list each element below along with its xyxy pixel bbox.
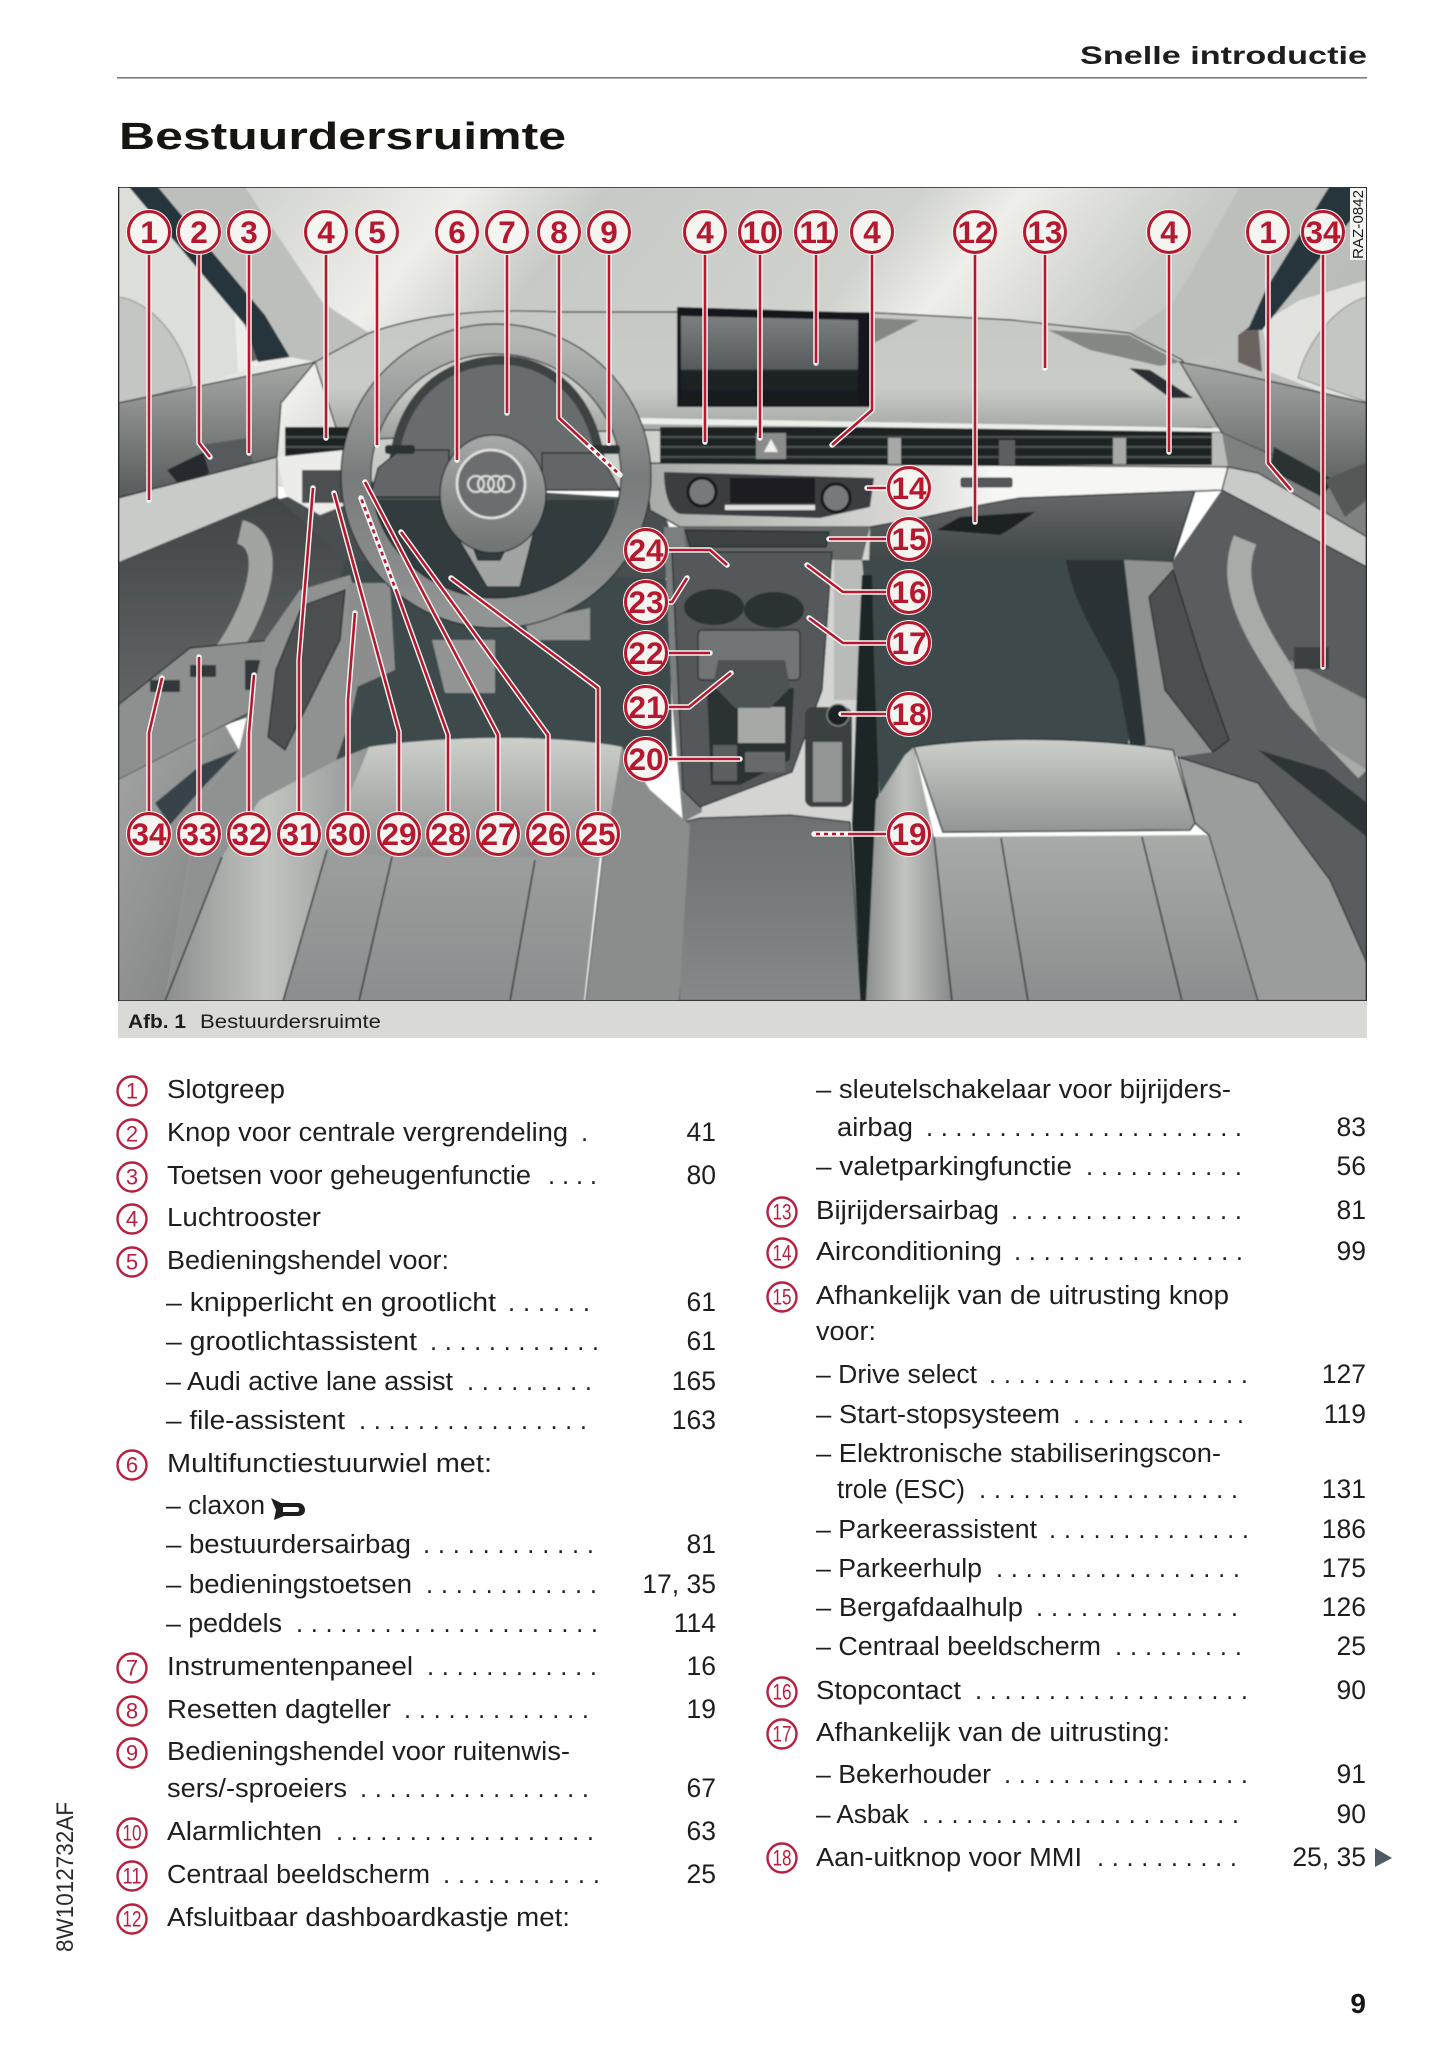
item 9: sers/-sproeiers xyxy=(167,1775,347,1803)
callout 32 xyxy=(226,675,272,857)
item 2: 2 xyxy=(126,1122,138,1146)
right column: legend list xyxy=(768,1076,1392,1872)
callout 14 xyxy=(867,465,932,511)
item 15 sub: Drive select: – Drive select xyxy=(816,1361,977,1389)
item 15 sub: Parkeerhulp xyxy=(816,1553,1366,1583)
callout 26: 26 xyxy=(530,816,566,852)
item 2 xyxy=(118,1117,716,1148)
item 5 sub: file-assistent xyxy=(166,1405,716,1435)
callout 19 xyxy=(814,811,932,857)
item 3: 3 xyxy=(126,1164,138,1190)
caption bar: Afb. 1 xyxy=(128,1011,186,1033)
item 6 sub: bestuurdersairbag: – bestuurdersairbag xyxy=(166,1531,411,1559)
item 1: Slotgreep xyxy=(167,1076,285,1104)
item 15: voor: xyxy=(816,1318,876,1346)
item 16 xyxy=(768,1675,1366,1706)
item 1 xyxy=(118,1076,285,1106)
item 15 sub: Start-stopsysteem xyxy=(816,1399,1366,1429)
item 15 sub: Centraal beeldscherm xyxy=(816,1631,1366,1661)
item 12 sub: sleutelschakelaar: 83 xyxy=(1337,1112,1366,1142)
item 8: Resetten dagteller xyxy=(167,1696,392,1724)
item 6 sub: bedieningstoetsen xyxy=(166,1569,716,1599)
item 5 sub: file-assistent: 163 xyxy=(672,1405,716,1435)
callout 19: 19 xyxy=(891,816,927,852)
item 13: . . . . . . . . . . . . . . . . xyxy=(1011,1197,1242,1225)
item 12: 12 xyxy=(122,1906,142,1932)
item 15 sub: Parkeerhulp: – Parkeerhulp xyxy=(816,1555,982,1583)
callout 3 xyxy=(226,209,272,453)
callout 25 xyxy=(451,578,621,857)
item 8: 19 xyxy=(687,1694,716,1724)
callout 7 xyxy=(484,209,530,413)
item 15 sub: ESC: trole (ESC) xyxy=(837,1476,965,1504)
callout 4 right vent: 4 xyxy=(1160,214,1178,250)
item 15 sub: Drive select xyxy=(816,1359,1366,1389)
item 14: 14 xyxy=(772,1240,792,1266)
item 15 sub: ESC: . . . . . . . . . . . . . . . . . . xyxy=(979,1476,1238,1504)
instrument binnacle xyxy=(392,360,602,480)
item 12 sub: sleutelschakelaar xyxy=(816,1076,1366,1142)
center armrest xyxy=(679,815,861,1001)
item 9 xyxy=(118,1738,716,1803)
wheel lower void xyxy=(375,500,615,603)
item 1: 1 xyxy=(126,1078,138,1104)
MMI storage xyxy=(805,707,852,807)
cup holders xyxy=(684,589,744,625)
item 12: Afsluitbaar dashboardkastje met: xyxy=(167,1904,570,1932)
callout 10 xyxy=(737,209,783,438)
callout 4 center right vent: 4 xyxy=(863,214,881,250)
header: Snelle introductie: Snelle introductie xyxy=(1080,42,1367,70)
driver seat xyxy=(165,738,690,1001)
callout 9 xyxy=(586,209,632,443)
item 15 sub: Centraal beeldscherm: – Centraal beeldscherm xyxy=(816,1633,1101,1661)
callout 27 xyxy=(365,482,521,857)
item 13: 81 xyxy=(1337,1195,1366,1225)
callout 12 xyxy=(952,209,998,522)
callout 8 xyxy=(536,209,620,475)
vent band left xyxy=(284,426,350,457)
callout 2 xyxy=(176,209,222,457)
left door sill and speaker xyxy=(165,575,368,1001)
callout 31 xyxy=(276,488,322,857)
callout 21 xyxy=(623,673,731,730)
item 8: . . . . . . . . . . . . . xyxy=(404,1696,589,1724)
right door upper xyxy=(1178,360,1366,478)
item 15 sub: Parkeerassistent: – Parkeerassistent xyxy=(816,1516,1037,1544)
callout 11 xyxy=(793,209,839,363)
callout 1 right: 1 xyxy=(1259,214,1277,250)
item 16: Stopcontact xyxy=(816,1677,961,1705)
item 2: 41 xyxy=(687,1117,716,1147)
page number: 9 xyxy=(1350,1988,1366,2019)
item 18 xyxy=(768,1842,1366,1872)
callout 8: 8 xyxy=(550,214,568,250)
item 15 sub: Bergafdaalhulp xyxy=(816,1592,1366,1622)
item 5: Bedieningshendel voor: xyxy=(167,1247,449,1275)
item 3: 80 xyxy=(687,1160,716,1190)
item 5 sub: lane assist xyxy=(166,1366,716,1396)
title: Bestuurdersruimte xyxy=(119,116,566,158)
item 9: 67 xyxy=(687,1773,716,1803)
item 17 sub: Asbak: . . . . . . . . . . . . . . . . . . . . . . xyxy=(922,1801,1239,1829)
item 7 xyxy=(118,1651,716,1682)
caption bar: Bestuurdersruimte xyxy=(200,1011,381,1033)
callout 11: 11 xyxy=(799,214,833,250)
item 18: 25, 35 xyxy=(1292,1842,1366,1872)
item 5 sub: lane assist: . . . . . . . . . xyxy=(467,1368,592,1396)
callout 23 xyxy=(623,578,687,625)
Audi emblem xyxy=(457,450,525,518)
callout 17 xyxy=(809,618,932,666)
callout 13: 13 xyxy=(1027,214,1063,250)
callout 14: 14 xyxy=(891,470,927,506)
right side window and mirror xyxy=(1238,280,1367,410)
passenger seat xyxy=(866,739,1367,1001)
item 15 sub: Centraal beeldscherm: . . . . . . . . . xyxy=(1115,1633,1242,1661)
continuation arrow xyxy=(1375,1848,1392,1867)
callout 6 xyxy=(434,209,480,460)
item 17 sub: Asbak: 90 xyxy=(1337,1799,1366,1829)
item 14: Airconditioning xyxy=(816,1238,1002,1266)
shifter pad xyxy=(698,630,800,680)
item 15 sub: ESC: – Elektronische stabiliseringscon- xyxy=(816,1440,1221,1468)
callout 25: 25 xyxy=(580,816,616,852)
callout 33: 33 xyxy=(181,816,217,852)
item 5 sub: lane assist: 165 xyxy=(672,1366,716,1396)
item 6 sub: bedieningstoetsen: 17, 35 xyxy=(642,1569,716,1599)
callout 29: 29 xyxy=(381,816,417,852)
callout 3: 3 xyxy=(240,214,258,250)
windshield xyxy=(118,187,1367,487)
item 5 sub: lane assist: – Audi active lane assist xyxy=(166,1368,453,1396)
right footwell xyxy=(852,560,1146,1001)
quattro badge xyxy=(961,478,1012,487)
item 9: Bedieningshendel voor ruitenwis- xyxy=(167,1738,570,1766)
callout 9: 9 xyxy=(600,214,618,250)
callout 4 right vent xyxy=(1146,209,1192,452)
item 15 sub: Start-stopsysteem: – Start-stopsysteem xyxy=(816,1401,1060,1429)
callout 10: 10 xyxy=(742,214,778,250)
item 8: 8 xyxy=(126,1698,138,1724)
dashboard pad xyxy=(315,311,1225,440)
item 10 xyxy=(118,1816,716,1848)
left A-pillar xyxy=(129,187,369,362)
item 5 sub: grootlichtassistent: – grootlichtassistent xyxy=(166,1328,417,1356)
item 6 sub: bestuurdersairbag xyxy=(166,1529,716,1559)
item 5 sub: file-assistent: . . . . . . . . . . . . . . . . xyxy=(359,1407,587,1435)
item 4: 4 xyxy=(126,1206,138,1232)
item 5: 5 xyxy=(126,1250,138,1274)
callout 18: 18 xyxy=(891,696,927,732)
callout 31: 31 xyxy=(281,816,317,852)
item 11: 11 xyxy=(122,1864,142,1888)
item 6: Multifunctiestuurwiel met: xyxy=(167,1450,492,1478)
callout 28 xyxy=(361,498,471,857)
illustration: car interior xyxy=(118,187,1367,1001)
lower dash under wheel xyxy=(277,480,680,640)
item 5 sub: knipperlicht: 61 xyxy=(687,1287,716,1317)
item 15: Afhankelijk van de uitrusting knop xyxy=(816,1282,1229,1310)
item 6 sub: peddels: 114 xyxy=(674,1608,716,1638)
left footwell xyxy=(290,560,672,800)
item 6 sub: bedieningstoetsen: . . . . . . . . . . . . xyxy=(426,1571,597,1599)
item 6 sub: peddels: – peddels xyxy=(166,1610,282,1638)
central screen xyxy=(677,307,872,407)
callout 24 xyxy=(623,527,727,573)
item 10: Alarmlichten xyxy=(167,1818,322,1846)
callout 34 left: 34 xyxy=(131,816,167,852)
item 18: . . . . . . . . . . xyxy=(1097,1844,1237,1872)
callout 20: 20 xyxy=(628,741,664,777)
callout 18 xyxy=(841,691,932,737)
item 17 sub: Bekerhouder: 91 xyxy=(1337,1759,1366,1789)
item 11: . . . . . . . . . . . xyxy=(443,1861,600,1889)
callout 5 xyxy=(354,209,400,445)
callout 1 right xyxy=(1245,209,1291,490)
callout 32: 32 xyxy=(231,816,267,852)
item 4 xyxy=(118,1204,322,1234)
item 15: 15 xyxy=(772,1284,792,1310)
item 6 sub: bestuurdersairbag: 81 xyxy=(687,1529,716,1559)
item 5 sub: knipperlicht: – knipperlicht en grootlicht xyxy=(166,1289,496,1317)
callout 1 left xyxy=(126,209,172,500)
artwork code label: RAZ-0842 xyxy=(1350,190,1367,259)
item 15 sub: Start-stopsysteem: 119 xyxy=(1324,1399,1366,1429)
steering wheel xyxy=(341,324,651,628)
dash trim strip xyxy=(645,463,1228,527)
item 15 xyxy=(768,1282,1229,1346)
pedals and column xyxy=(348,583,590,693)
item 13: Bijrijdersairbag xyxy=(816,1197,999,1225)
item 17 sub: Bekerhouder: . . . . . . . . . . . . . . . . . xyxy=(1004,1761,1248,1789)
item 7: Instrumentenpaneel xyxy=(167,1653,413,1681)
callout 7: 7 xyxy=(498,214,516,250)
stalks xyxy=(385,445,415,454)
item 17 sub: Bekerhouder xyxy=(816,1759,1366,1789)
callout 17: 17 xyxy=(891,625,927,661)
item 11: Centraal beeldscherm xyxy=(167,1861,430,1889)
item 15 sub: Parkeerassistent xyxy=(816,1514,1366,1544)
frame border xyxy=(118,187,1366,1001)
item 15 sub: Parkeerassistent: 186 xyxy=(1322,1514,1366,1544)
item 9: 9 xyxy=(126,1740,138,1766)
button strip xyxy=(685,530,829,547)
item 4: Luchtrooster xyxy=(167,1204,322,1232)
item 17 sub: Asbak: – Asbak xyxy=(816,1801,909,1829)
callout 34 right: 34 xyxy=(1305,214,1341,250)
item 12 sub: valetparkingfunctie: 56 xyxy=(1337,1151,1366,1181)
callout 13 xyxy=(1022,209,1068,368)
item 6: 6 xyxy=(126,1452,138,1478)
left side window and mirror xyxy=(119,188,259,402)
vent band center and right xyxy=(640,418,1224,465)
callout 23: 23 xyxy=(628,584,664,620)
item 15 sub: ESC: 131 xyxy=(1322,1474,1366,1504)
item 10: . . . . . . . . . . . . . . . . . . xyxy=(336,1818,594,1846)
item 15 sub: Bergafdaalhulp: – Bergafdaalhulp xyxy=(816,1594,1023,1622)
item 12 sub: valetparkingfunctie xyxy=(816,1151,1366,1181)
callout 34 left xyxy=(126,678,172,857)
item 6 sub: claxon with horn icon: – claxon xyxy=(166,1492,265,1520)
callout 27: 27 xyxy=(480,816,516,852)
item 15 sub: Parkeerhulp: . . . . . . . . . . . . . . . . . xyxy=(996,1555,1240,1583)
item 12 sub: sleutelschakelaar: airbag xyxy=(837,1114,913,1142)
item 10: 10 xyxy=(122,1820,142,1846)
callout 12: 12 xyxy=(957,214,993,250)
callout 20 xyxy=(623,736,740,782)
item 14 xyxy=(768,1236,1366,1268)
item 16: . . . . . . . . . . . . . . . . . . . xyxy=(975,1677,1248,1705)
callout 22 xyxy=(623,630,710,676)
wheel hub xyxy=(440,435,546,553)
item 8 xyxy=(118,1694,716,1726)
item 12 sub: sleutelschakelaar: – sleutelschakelaar voor bijrijders- xyxy=(816,1076,1231,1104)
right door xyxy=(1124,362,1367,1001)
selector panel xyxy=(707,688,794,785)
left vent trim and switches xyxy=(277,450,345,515)
item 15 sub: Drive select: . . . . . . . . . . . . . . . . . . xyxy=(989,1361,1248,1389)
callout 4 center vent: 4 xyxy=(696,214,714,250)
callout 28: 28 xyxy=(430,816,466,852)
callout 34 right xyxy=(1300,209,1346,667)
item 3 xyxy=(118,1160,716,1192)
item 15 sub: Drive select: 127 xyxy=(1322,1359,1366,1389)
item 3: Toetsen voor geheugenfunctie xyxy=(167,1162,531,1190)
item 14: . . . . . . . . . . . . . . . . xyxy=(1014,1238,1243,1266)
item 7: 7 xyxy=(126,1656,138,1680)
left column: legend list xyxy=(118,1076,716,1934)
item 15 sub: Bergafdaalhulp: 126 xyxy=(1322,1592,1366,1622)
carbon trims xyxy=(872,318,1193,398)
item 2: . xyxy=(581,1119,588,1147)
callout 22: 22 xyxy=(628,635,664,671)
callout 24: 24 xyxy=(628,532,664,568)
left door upper xyxy=(118,362,315,563)
item 2: Knop voor centrale vergrendeling xyxy=(167,1119,568,1147)
callout 16: 16 xyxy=(891,574,927,610)
item 12 sub: sleutelschakelaar: . . . . . . . . . . . . . . . . . . . . . . xyxy=(926,1114,1242,1142)
callout 26 xyxy=(401,532,571,857)
center console xyxy=(664,527,870,822)
item 15 sub: Centraal beeldscherm: 25 xyxy=(1337,1631,1366,1661)
item 12 sub: valetparkingfunctie: . . . . . . . . . . . xyxy=(1086,1153,1242,1181)
item 5 sub: knipperlicht: . . . . . . xyxy=(508,1289,590,1317)
item 15 sub: Parkeerhulp: 175 xyxy=(1322,1553,1366,1583)
item 16: 16 xyxy=(772,1680,792,1704)
item 17 sub: Asbak xyxy=(816,1799,1366,1829)
gear shifter xyxy=(713,660,790,708)
item 18: 18 xyxy=(772,1846,792,1870)
item 10: 63 xyxy=(687,1816,716,1846)
item 16: 90 xyxy=(1337,1675,1366,1705)
item 6 sub: peddels: . . . . . . . . . . . . . . . . . . . . . xyxy=(296,1610,598,1638)
callout 21: 21 xyxy=(628,689,664,725)
item 11: 25 xyxy=(687,1859,716,1889)
item 17: 17 xyxy=(772,1722,792,1746)
item 3: . . . . xyxy=(548,1162,597,1190)
callout 5: 5 xyxy=(368,214,386,250)
item 5 sub: grootlichtassistent: 61 xyxy=(687,1326,716,1356)
item 6 sub: claxon with horn icon xyxy=(166,1492,305,1520)
item 9: . . . . . . . . . . . . . . . . xyxy=(360,1775,589,1803)
callout 30 xyxy=(325,613,371,857)
callout 2: 2 xyxy=(190,214,208,250)
item 15 sub: ESC xyxy=(816,1440,1366,1504)
item 18: Aan-uitknop voor MMI xyxy=(816,1844,1082,1872)
item 5 sub: grootlichtassistent xyxy=(166,1326,716,1356)
item 12 sub: valetparkingfunctie: – valetparkingfunctie xyxy=(816,1153,1072,1181)
item 17: Afhankelijk van de uitrusting: xyxy=(816,1719,1170,1747)
item 5 sub: knipperlicht xyxy=(166,1287,716,1317)
item 13 xyxy=(768,1195,1366,1226)
caption bar xyxy=(118,1001,1367,1038)
item 6 sub: bestuurdersairbag: . . . . . . . . . . . . xyxy=(423,1531,594,1559)
item 5 sub: grootlichtassistent: . . . . . . . . . . . . xyxy=(430,1328,599,1356)
left lower door xyxy=(118,497,345,1001)
climate panel xyxy=(664,472,874,518)
item 17 sub: Bekerhouder: – Bekerhouder xyxy=(816,1761,992,1789)
callout 29 xyxy=(334,493,422,857)
passenger glovebox xyxy=(862,490,1195,562)
callout 4 left vent xyxy=(303,209,349,438)
callout 6: 6 xyxy=(448,214,466,250)
right A-pillar xyxy=(1132,188,1366,340)
item 6 sub: bedieningstoetsen: – bedieningstoetsen xyxy=(166,1571,412,1599)
item 6 sub: peddels xyxy=(166,1608,716,1638)
item 14: 99 xyxy=(1337,1236,1366,1266)
item 11 xyxy=(118,1859,716,1890)
callout 4 center right vent xyxy=(832,209,895,445)
item 7: 16 xyxy=(687,1651,716,1681)
callout 4 left vent: 4 xyxy=(317,214,335,250)
item 15 sub: Bergafdaalhulp: . . . . . . . . . . . . . . xyxy=(1036,1594,1238,1622)
item 15 sub: Parkeerassistent: . . . . . . . . . . . . . . xyxy=(1049,1516,1249,1544)
callout 30: 30 xyxy=(330,816,366,852)
wheel spokes xyxy=(370,450,449,497)
item 13: 13 xyxy=(772,1200,792,1224)
item 15 sub: Start-stopsysteem: . . . . . . . . . . . . xyxy=(1073,1401,1244,1429)
callout 15 xyxy=(829,516,932,562)
item 5 sub: file-assistent: – file-assistent xyxy=(166,1407,345,1435)
callout 1 left: 1 xyxy=(140,214,158,250)
callout 15: 15 xyxy=(891,521,927,557)
document code, rotated: 8W1012732AF xyxy=(52,1802,79,1952)
item 7: . . . . . . . . . . . . xyxy=(427,1653,597,1681)
callout 4 center vent xyxy=(682,209,728,442)
callout 33 xyxy=(176,657,222,857)
callout 16 xyxy=(807,565,932,615)
